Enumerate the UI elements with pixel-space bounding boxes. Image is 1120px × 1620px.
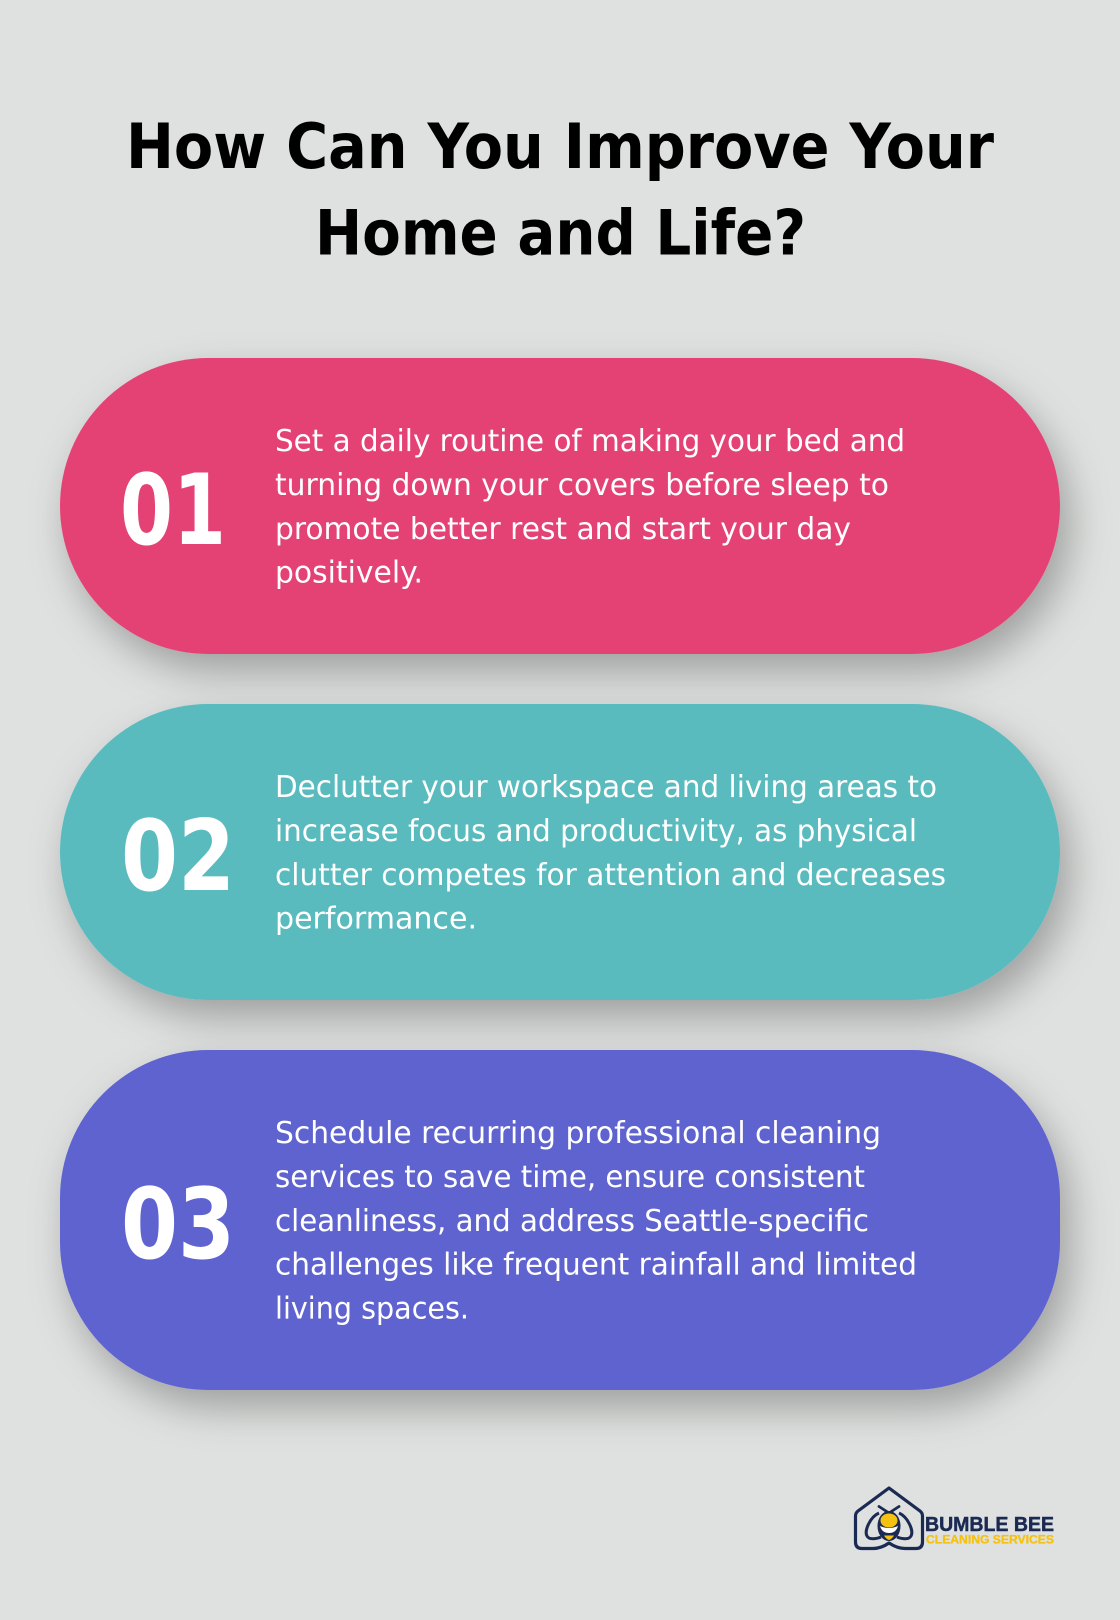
title: Home and Life? [315,196,806,270]
icon: bee [866,1506,912,1541]
text: step 01 description: promote better rest and start your day [275,512,851,547]
text: step 03 description: challenges like frequent rainfall and limited [275,1248,917,1283]
panel: step 01 [60,358,1060,654]
text: step 02 description: clutter competes for attention and decreases [275,858,946,893]
text: step 02 description: increase focus and productivity, as physical [275,814,917,849]
panel: step 03 [60,1050,1060,1390]
text: step 02 description [275,770,946,937]
icon: house outline [856,1488,922,1548]
text: step 03 description: services to save time, ensure consistent [275,1160,865,1195]
pill background 01 [60,358,1060,654]
text: step 01 description [275,424,905,591]
text: step 01 description: Set a daily routine of making your bed and [275,424,905,459]
pill background 02 [60,704,1060,1000]
text: step 03 description: living spaces. [275,1292,469,1326]
panel: step 02 [60,704,1060,1000]
wordmark: BUMBLE BEE [925,1513,1054,1536]
title: How Can You Improve Your [126,110,994,183]
text: step 02 description: performance. [275,902,477,937]
text: step 02 description: Declutter your workspace and living areas to [275,770,937,805]
text: step 01 description: turning down your covers before sleep to [275,468,889,503]
text: step 03 description: Schedule recurring professional cleaning [275,1116,881,1151]
number 01: 01 [120,454,226,568]
text: step 03 description [275,1116,917,1326]
pill background 03 [60,1050,1060,1390]
title [126,110,994,270]
logo: Bumble Bee Cleaning Services [856,1488,1054,1548]
text: step 03 description: cleanliness, and address Seattle-specific [275,1204,869,1239]
tagline: CLEANING SERVICES [926,1534,1054,1546]
text: step 01 description: positively. [275,556,423,591]
number 03: 03 [121,1168,235,1282]
number 02: 02 [121,800,235,914]
